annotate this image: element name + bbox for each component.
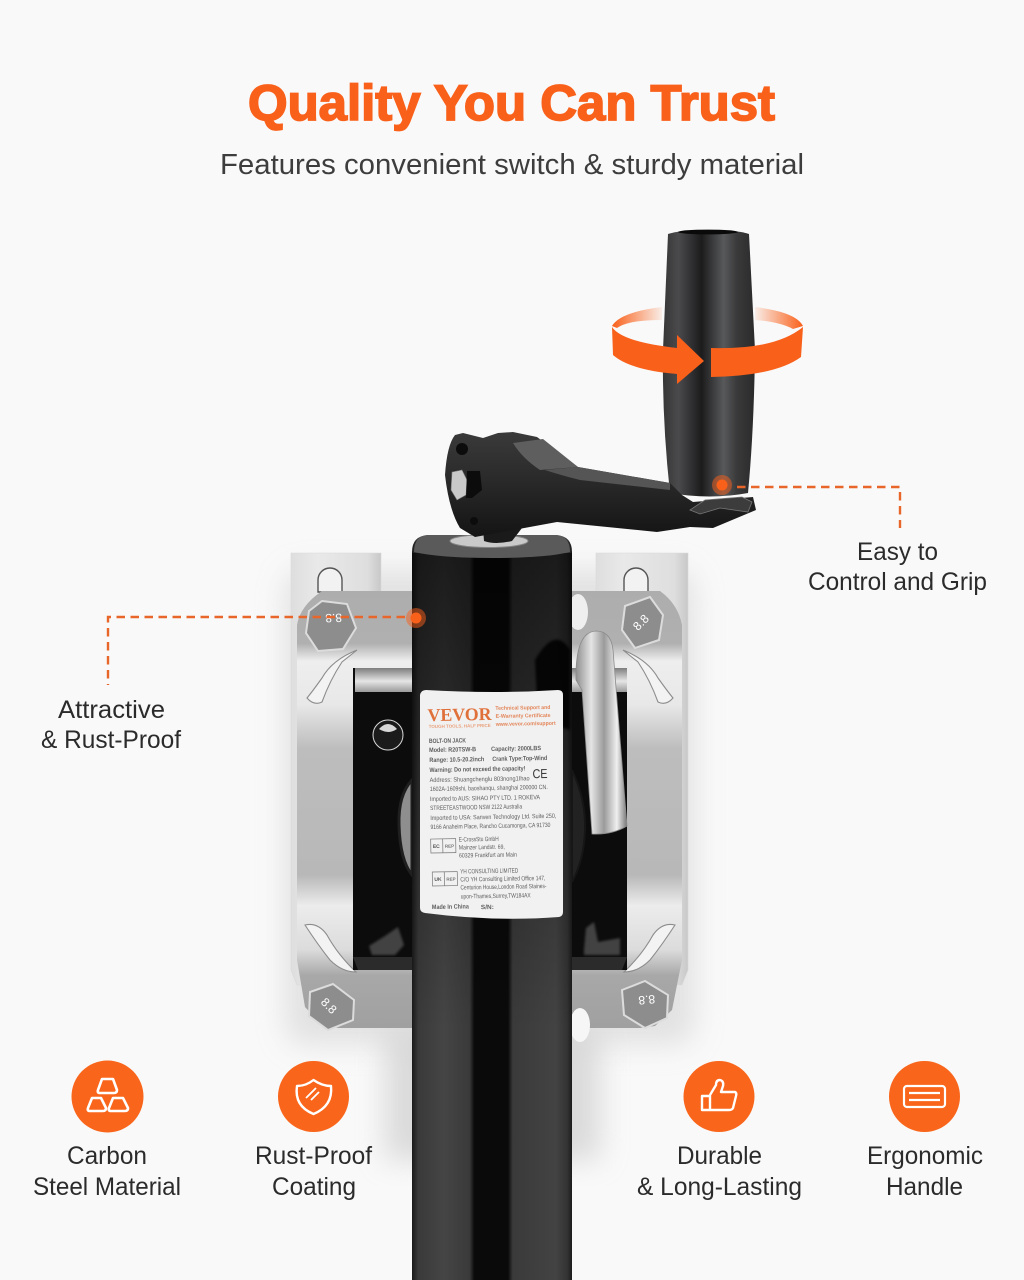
icon: handle bar [889,1061,960,1132]
bottom left hex bolt: 8.8 [318,995,340,1017]
specification text: E-CrossStu GmbH [459,836,499,844]
jack tube [412,535,572,1280]
dark reflection on tube [535,640,570,730]
specification text: Capacity: 2000LBS [491,745,541,753]
feature label [867,1142,983,1201]
UK REP box [432,872,457,886]
crank handle grip [663,230,755,496]
top washer [450,534,528,548]
CE mark: CE [532,766,548,781]
feature label [255,1142,372,1201]
callout: tube [41,608,426,754]
icon: shield [278,1061,349,1132]
UK REP box: UK [434,877,442,883]
feature: durable and long-lasting [637,1061,802,1201]
callout text [808,538,987,596]
arm small screws [456,443,478,525]
plate holes [570,1008,590,1042]
EC REP box: REP [445,844,454,849]
specification text: YH CONSULTING LIMITED [460,868,519,876]
support text: www.vevor.com/support [495,721,556,728]
specification text: 1602A-1609shi, baoshanqu, shanghai 200000 CN. [430,784,548,793]
VEVOR logo: VEVOR [427,704,493,725]
gear disc [399,780,412,875]
rating label [420,690,563,919]
bracket slots [318,568,648,592]
feature label: Coating [272,1173,356,1201]
feature label: Ergonomic [867,1142,983,1170]
callout leader line [737,487,900,528]
grip latch [690,497,752,514]
rating label: TOUGH TOOLS, HALF PRICE [429,723,491,729]
EC REP box [431,839,456,853]
bottom right hex bolt: 8.8 [638,992,656,1007]
specification text [429,736,558,912]
arm bevel [513,439,578,470]
product: bolt-on jack [285,230,756,1280]
support text [494,705,556,728]
specification text: Made In China [432,903,469,911]
crank arm [445,432,756,537]
soft shadow around the lower tube [385,1030,600,1160]
callout text: Control and Grip [808,568,987,596]
top right hex bolt: 8.8 [630,611,652,633]
callout text: & Rust-Proof [41,726,181,754]
specification text: Centurion House,London Road Staines- [460,883,547,892]
top left hex bolt: 8.8 [325,611,342,625]
soft shadow behind the mounting plate [285,570,695,1045]
feature label: & Long-Lasting [637,1173,802,1201]
rotation arrow [612,307,803,384]
left mounting plate [297,591,420,1028]
arm pivot bolt [451,470,467,500]
specification text: Warning: Do not exceed the capacity! [429,765,526,774]
specification text: S/N: [481,904,494,911]
bottom left hex bolt [309,984,354,1030]
left bracket flange [291,553,381,985]
specification text: C/O YH Consulting Limited Office 147, [460,875,546,884]
feature label: Durable [677,1142,762,1170]
arm pivot nut [466,471,482,498]
grip top opening [678,230,738,234]
feature: rust-proof coating [255,1061,372,1201]
title: Quality You Can Trust [248,75,775,131]
specification text: Range: 10.5-20.2inch [429,756,484,764]
callout leader line [108,617,405,685]
bottom right hex bolt [622,981,668,1028]
crank hub stem [483,528,522,543]
right mounting plate [560,591,682,1028]
support text: E-Warranty Certificate [495,713,551,720]
specification text: Mainzer Landstr. 69, [459,844,505,852]
specification text: upon-Thames,Surrey,TW184AX [461,892,531,901]
callout text [41,696,181,754]
specification text: 60329 Frankfurt am Main [459,852,517,860]
feature label: Handle [886,1173,963,1201]
feature: carbon steel material [33,1060,181,1201]
callout text: Easy to [857,538,938,566]
right bracket flange [596,553,688,985]
support text: Technical Support and [495,705,550,712]
specification text: Imported to USA: Sanven Technology Ltd. Suite 250, [430,813,557,822]
arm top highlight [545,467,670,490]
specification text: Crank Type:Top-Wind [492,755,547,763]
right black housing [572,668,627,970]
housing top lip [355,668,412,692]
feature label: Steel Material [33,1173,181,1201]
tube top surface [414,535,570,558]
left black housing [353,668,412,970]
top left hex bolt [306,601,356,651]
arrow front band left with head [612,327,704,384]
housing hole [373,720,403,750]
housing fasteners [369,927,404,955]
specification text: 9166 Anaheim Place, Rancho Cucamonga, CA 91730 [430,822,551,831]
specification text: Model: R20TSW-B [429,746,477,754]
icon: thumbs up [684,1061,754,1132]
callout: handle [712,475,987,596]
plate embossing [305,650,675,972]
UK REP box: REP [446,877,456,882]
callout dot [712,475,732,495]
feature label: Carbon [67,1142,147,1170]
subtitle: Features convenient switch & sturdy material [220,149,804,181]
specification text: BOLT-ON JACK [429,737,466,745]
arrow front band right [711,327,803,377]
tube upper shading [412,553,572,1030]
icon: metal ingots [72,1060,144,1132]
silver locking pin [576,631,627,834]
arrow back ring left [612,307,662,328]
housing bottom lip [353,957,412,970]
arrow back ring right [755,307,803,329]
top right hex bolt [622,597,663,648]
callout text: Attractive [58,696,165,724]
callout dot [406,608,426,628]
specification text: STREETEASTWOOD NSW 2122 Australia [430,803,523,812]
EC REP box: EC [433,844,440,850]
specification text: Address: Shuangchenglu 803nong1Ihao [430,775,530,784]
feature label: Rust-Proof [255,1142,372,1170]
specification text: Imported to AUS: SIHAO PTY LTD. 1 ROKEVA [430,794,541,803]
feature: ergonomic handle [867,1061,983,1201]
feature label [33,1142,181,1201]
feature label [637,1142,802,1201]
